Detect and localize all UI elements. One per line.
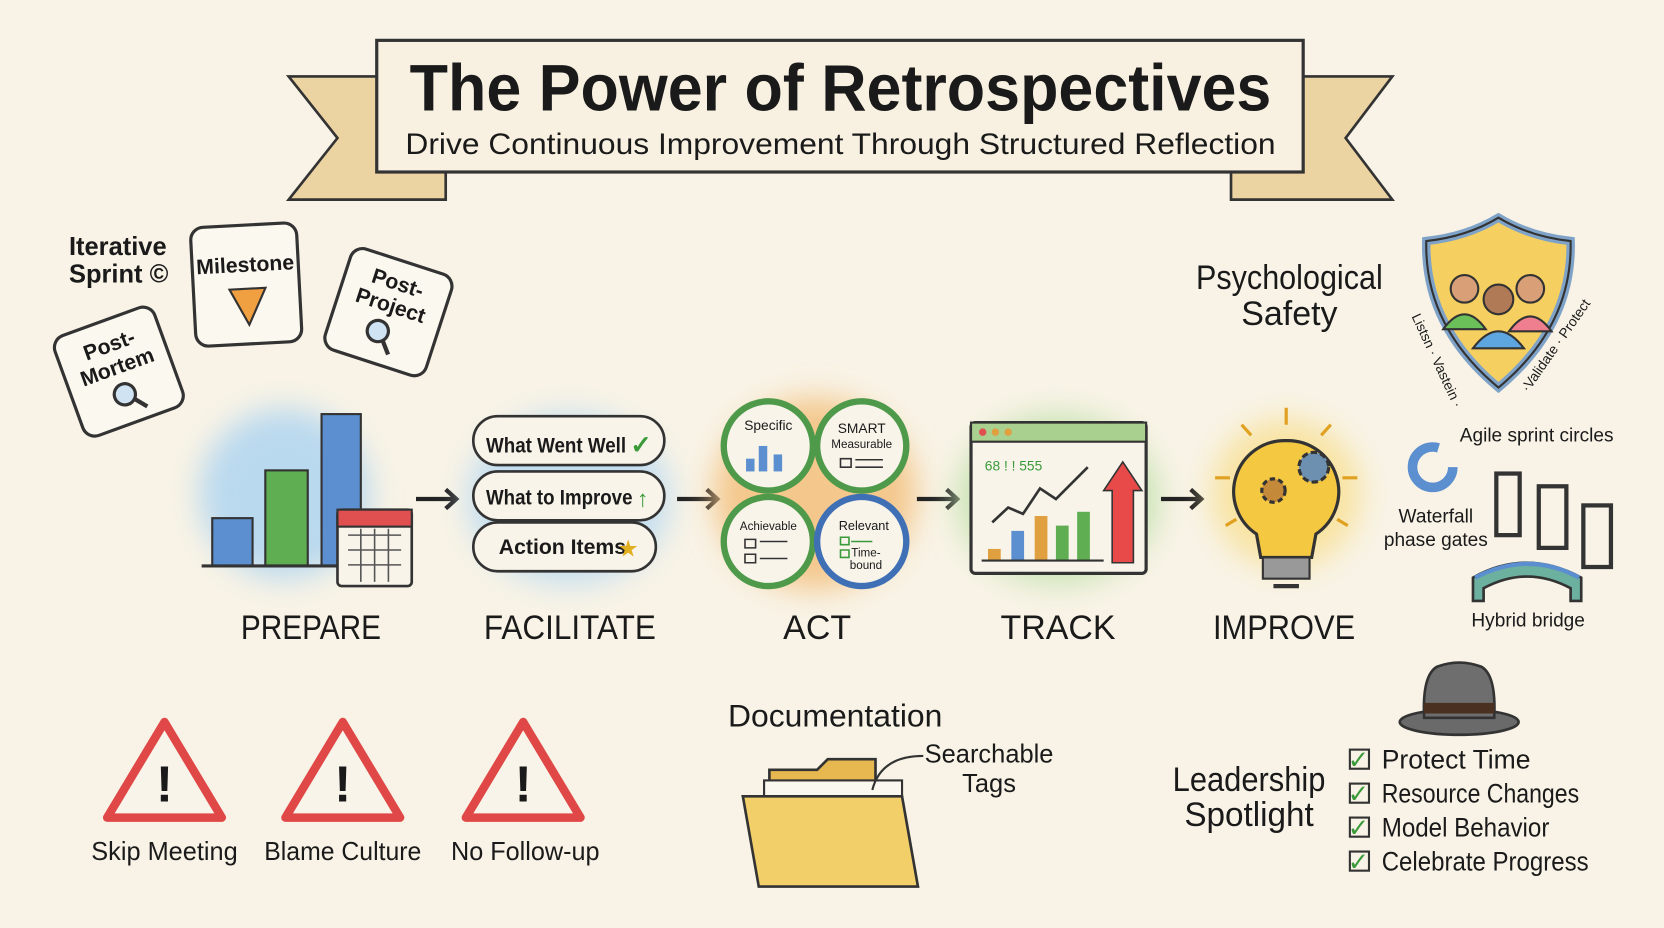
arrow — [1161, 489, 1201, 509]
card: post-project: Post- — [369, 265, 426, 303]
stage: act SMART circles: Achievable — [740, 520, 797, 533]
stage: track dashboard: TRACK — [1001, 609, 1116, 647]
card: post-mortem: Post- — [81, 326, 138, 365]
card: post-project: Project — [353, 284, 428, 328]
methods: agile / waterfall / hybrid: Agile sprint circles — [1460, 426, 1614, 447]
stage: act SMART circles: SMART — [838, 421, 886, 436]
stage: facilitate: FACILITATE — [484, 609, 656, 647]
stage: prepare: PREPARE — [241, 609, 381, 647]
card: milestone — [190, 222, 302, 347]
documentation: Searchable — [925, 740, 1053, 768]
stage: act SMART circles — [714, 398, 916, 647]
documentation: Tags — [962, 770, 1016, 798]
label: iterative sprint: Iterative — [69, 233, 167, 261]
psychological safety: Psychological — [1196, 259, 1383, 297]
card: post-mortem — [51, 304, 187, 440]
psychological safety — [1196, 218, 1593, 410]
documentation — [728, 697, 1053, 887]
methods: agile / waterfall / hybrid: Hybrid bridge — [1471, 610, 1585, 631]
leadership spotlight: Celebrate Progress — [1382, 847, 1589, 877]
stage: act SMART circles: Time- — [851, 546, 881, 559]
stage: improve lightbulb — [1212, 408, 1360, 647]
icon: shield: Listsn · Vastein · — [1409, 311, 1465, 410]
stage: facilitate: Action Items — [499, 536, 626, 559]
psychological safety: Safety — [1241, 295, 1338, 333]
icon: shield — [1409, 218, 1593, 410]
card: milestone: Milestone — [196, 251, 295, 279]
stage: track dashboard: 68 ! ! 555 — [985, 458, 1043, 473]
arrow — [917, 489, 957, 509]
card: post-mortem: Mortem — [77, 344, 157, 391]
title: The Power of Retrospectives — [410, 50, 1271, 124]
stage: prepare — [200, 409, 412, 647]
warnings: anti-patterns: No Follow-up — [451, 838, 600, 866]
leadership spotlight — [1173, 663, 1589, 877]
documentation: Documentation — [728, 697, 942, 733]
leadership spotlight: Protect Time — [1382, 745, 1531, 775]
stage: facilitate: ★ — [618, 535, 639, 561]
methods: agile / waterfall / hybrid: Waterfall — [1399, 506, 1473, 527]
retrospective types cards: Sprint © — [69, 260, 169, 288]
leadership spotlight: Leadership — [1173, 761, 1325, 799]
title banner — [289, 40, 1392, 200]
warnings: anti-patterns: Blame Culture — [264, 838, 421, 866]
icon: hat — [1400, 663, 1519, 735]
stage: act SMART circles: Measurable — [831, 438, 892, 451]
leadership spotlight: ✓ — [1348, 747, 1369, 775]
stage: act SMART circles: ACT — [783, 609, 851, 647]
methods: agile / waterfall / hybrid — [1384, 426, 1614, 631]
stage: facilitate: ✓ — [630, 431, 652, 459]
leadership spotlight: Spotlight — [1184, 796, 1314, 834]
icon: shield: ·Validate · Protect — [1518, 296, 1593, 395]
stage: improve lightbulb: IMPROVE — [1213, 609, 1355, 647]
icon: bridge — [1473, 563, 1581, 601]
card: post-project — [322, 245, 455, 379]
leadership spotlight: Model Behavior — [1382, 813, 1550, 843]
warnings: anti-patterns: Skip Meeting — [91, 838, 238, 866]
methods: agile / waterfall / hybrid: phase gates — [1384, 530, 1488, 551]
arrow — [677, 489, 717, 509]
stage: facilitate: What Went Well — [486, 434, 626, 457]
arrow — [416, 489, 456, 509]
stage: facilitate: ↑ — [637, 485, 648, 511]
subtitle: Drive Continuous Improvement Through Structured Reflection — [405, 128, 1276, 161]
icon: calendar — [337, 510, 412, 586]
stage: facilitate: What to Improve — [486, 486, 633, 509]
warnings: anti-patterns — [91, 722, 600, 866]
leadership spotlight: ✓ — [1348, 815, 1369, 843]
stage: facilitate — [468, 414, 670, 647]
leadership spotlight: ✓ — [1348, 849, 1369, 877]
leadership spotlight: ✓ — [1348, 781, 1369, 809]
retrospective types cards — [51, 222, 455, 440]
stage: act SMART circles: Relevant — [839, 518, 889, 533]
warnings: anti-patterns: ! — [156, 756, 173, 813]
stage: act SMART circles: Specific — [744, 418, 793, 433]
warnings: anti-patterns: ! — [515, 756, 532, 813]
leadership spotlight: Resource Changes — [1382, 779, 1579, 809]
stage: track dashboard — [957, 414, 1159, 647]
stage: act SMART circles: bound — [850, 559, 882, 572]
warnings: anti-patterns: ! — [334, 756, 351, 813]
